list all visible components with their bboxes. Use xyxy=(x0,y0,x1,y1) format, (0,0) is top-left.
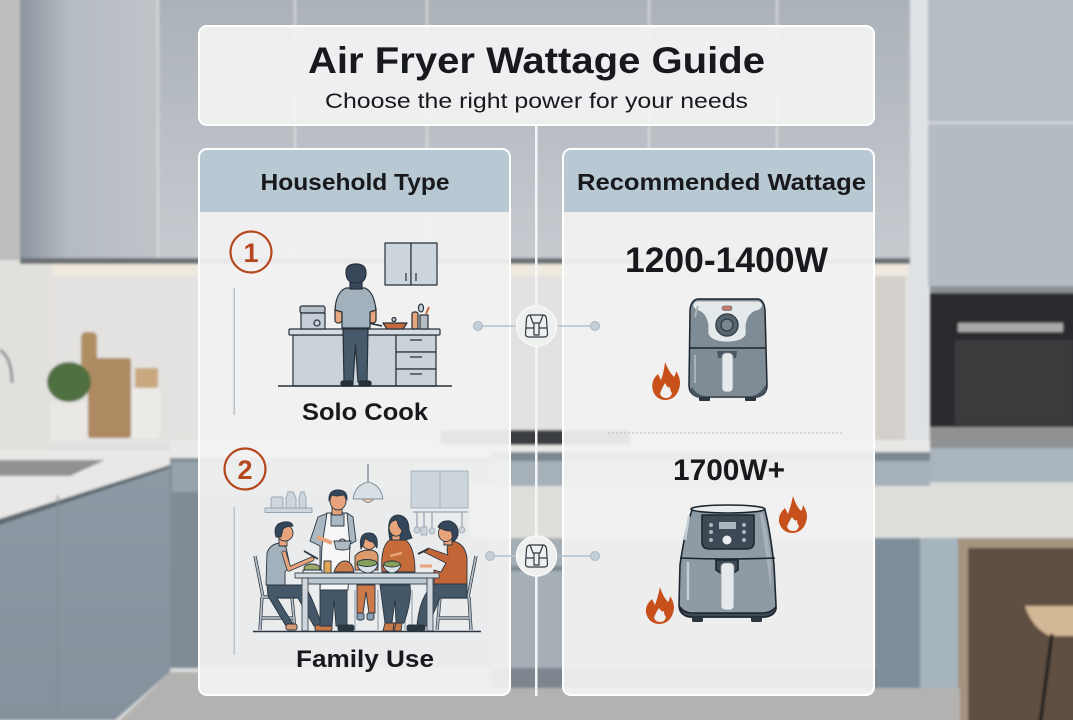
number badge 1: 1 xyxy=(243,238,259,268)
illustration: family use xyxy=(253,464,481,632)
person: girl xyxy=(355,533,378,620)
connector: row 1 xyxy=(474,306,600,346)
backsplash xyxy=(50,262,910,447)
header: recommended wattage: Recommended Wattage xyxy=(577,169,866,195)
pendant lamp xyxy=(353,464,383,502)
icon: air fryer large xyxy=(679,505,776,622)
number badge 1 xyxy=(230,232,272,272)
wattage: 1700W+: 1700W+ xyxy=(673,454,785,487)
left wall xyxy=(0,0,22,260)
person: solo cook xyxy=(335,264,376,386)
icon: small air fryer xyxy=(526,545,548,567)
person: man right xyxy=(407,521,467,631)
title: Air Fryer Wattage Guide xyxy=(308,40,765,81)
header: recommended wattage xyxy=(564,150,873,212)
number badge 2 xyxy=(224,448,266,490)
number badge 2: 2 xyxy=(237,455,253,485)
icon: flame lower xyxy=(646,587,674,624)
panel: recommended wattage xyxy=(563,149,874,695)
wall cabinet and utensils xyxy=(411,471,468,535)
subtitle: Choose the right power for your needs xyxy=(325,90,748,113)
icon: flame upper xyxy=(779,496,807,533)
center vertical connector line xyxy=(535,125,538,696)
centre lower cabinets xyxy=(490,458,930,488)
title panel xyxy=(199,26,874,125)
wattage: 1200-1400W: 1200-1400W xyxy=(625,241,828,280)
header: household type xyxy=(200,150,509,212)
panel: household type xyxy=(199,149,510,695)
chairs xyxy=(255,556,476,630)
person: woman xyxy=(380,515,415,631)
icon: air fryer small xyxy=(689,299,767,401)
counter props xyxy=(81,332,97,372)
label: solo cook: Solo Cook xyxy=(302,399,429,426)
niche xyxy=(875,276,905,446)
icon: small air fryer xyxy=(526,315,548,337)
header: household type: Household Type xyxy=(260,169,450,195)
person: standing man with apron xyxy=(310,490,356,631)
label: family use: Family Use xyxy=(296,646,434,673)
person: boy left xyxy=(266,522,332,631)
food and table setting xyxy=(303,560,401,573)
stool xyxy=(1025,606,1073,636)
left counter and lower cabinets xyxy=(170,440,930,458)
oven xyxy=(930,292,1073,448)
illustration: solo cook xyxy=(278,243,452,386)
icon: flame xyxy=(652,362,680,400)
connector: row 2 xyxy=(486,536,600,576)
dining table xyxy=(295,573,439,631)
wall cabinets xyxy=(20,0,157,262)
shelf with jars xyxy=(265,492,312,512)
